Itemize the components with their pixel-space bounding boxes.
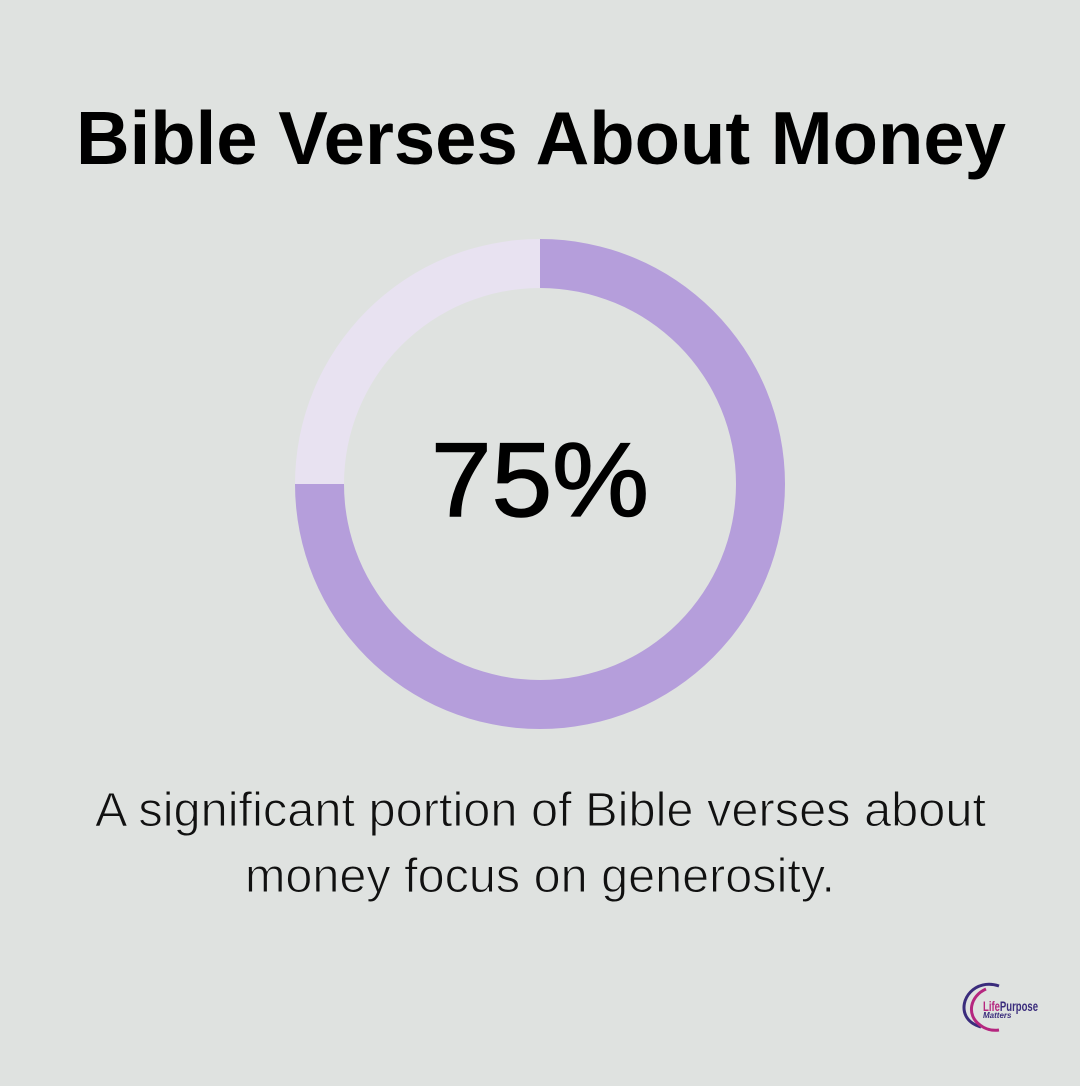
logo wordmark: LifePurpose [983,998,1038,1014]
description text: money focus on generosity. [245,850,835,903]
donut value: 75% [431,422,649,539]
logo: Life Purpose Matters [964,984,1038,1030]
donut filled 75% [295,239,785,729]
logo tagline: Matters [983,1011,1012,1020]
logo arcs [964,984,999,1027]
donut chart: 75 percent [295,239,785,729]
description text: A significant portion of Bible verses about [95,784,986,837]
title: Bible Verses About Money [76,96,1006,180]
description text [95,784,986,903]
donut remainder 25% [295,239,540,484]
